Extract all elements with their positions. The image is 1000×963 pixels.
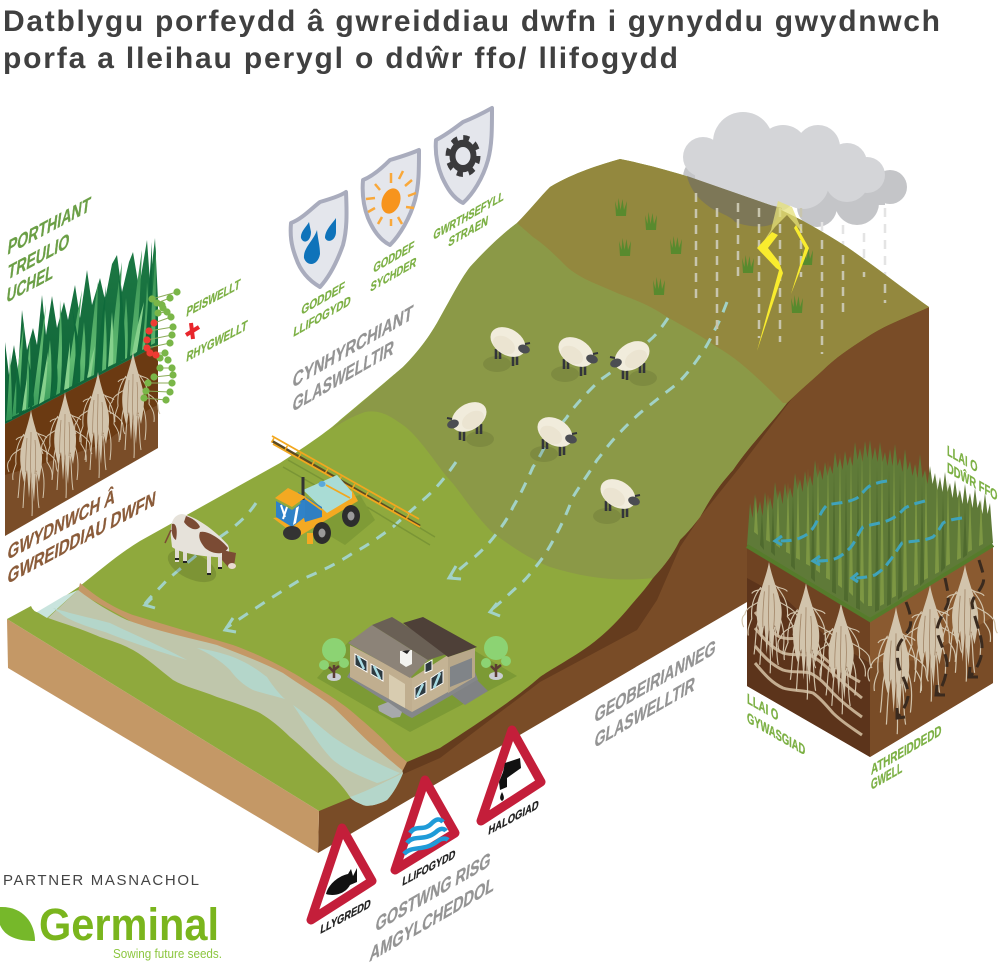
hill side: soil [318, 307, 929, 853]
title [3, 5, 940, 75]
text: better permeability: GWELL [871, 760, 902, 794]
title: Datblygu porfeydd â gwreiddiau dwfn i gynyddu gwydnwch [3, 5, 940, 38]
text: fescue plus ryegrass: RHYGWELLT [186, 316, 249, 365]
text: lower environmental risk: GOSTWNG RISG [374, 848, 492, 937]
warning sign: contamination: HALOGIAD [488, 797, 539, 838]
text: shield captions: LLIFOGYDD [293, 293, 352, 340]
right face [870, 547, 993, 757]
drainage arrows [897, 560, 984, 718]
DNA helix [140, 288, 181, 404]
deep roots [742, 562, 997, 734]
roots [8, 352, 160, 516]
house with trees [317, 617, 517, 732]
text: less compaction: GYWASGIAD [747, 710, 805, 759]
warning sign: flood: LLIFOGYDD [402, 847, 456, 889]
icon: shield flood tolerance [291, 192, 347, 287]
text: grassland geoengineering: GEOBEIRIANNEG [593, 636, 717, 728]
text: commercial partner: PARTNER MASNACHOL [3, 872, 199, 889]
logo: Germinal: Germinal [39, 899, 219, 950]
text: less compaction [747, 691, 805, 759]
text: fescue plus ryegrass [186, 275, 249, 365]
text: high digestibility forage: PORTHIANT [6, 193, 92, 260]
left face [747, 547, 870, 757]
cloud shadow [687, 176, 782, 226]
text: less compaction: LLAI O [747, 691, 778, 725]
icon: storm cloud [683, 112, 907, 238]
cow [163, 514, 236, 589]
zone: upland olive [517, 159, 929, 403]
text: shield captions: GODDEF [373, 238, 415, 276]
title: porfa a lleihau perygl o ddŵr ffo/ llifogydd [3, 42, 678, 75]
soil block [5, 345, 158, 536]
river channels [53, 608, 403, 806]
grass [5, 238, 158, 424]
text: less runoff: LLAI O [947, 443, 977, 476]
text: high digestibility forage: UCHEL [5, 260, 55, 308]
text: resilience with deep roots: GWREIDDIAU DWFN [6, 487, 157, 589]
rain beyond the hill [822, 208, 885, 303]
grass tufts [615, 198, 813, 313]
icon: shield drought tolerance [363, 150, 419, 245]
text: better permeability: ATHREIDDEDD [871, 723, 941, 779]
sprayer tractor [272, 436, 435, 545]
warning sign: pollution: LLYGREDD [320, 896, 371, 937]
flow arrows on the slope [145, 302, 727, 632]
text: fescue plus ryegrass: PEISWELLT [186, 275, 242, 320]
text: grassland production: CYNHYRCHIANT [291, 301, 414, 393]
text: high digestibility forage: TREULIO [6, 229, 71, 285]
warning sign: flood [395, 780, 456, 889]
logo: Germinal: Sowing future seeds. [113, 946, 222, 961]
text: grassland geoengineering: GLASWELLTIR [593, 673, 696, 753]
land surface [7, 159, 929, 811]
text: better permeability [871, 723, 941, 794]
icon: shield stress resistance [436, 108, 492, 203]
text: high digestibility forage [5, 193, 92, 308]
lightning [757, 201, 809, 351]
spray boom [272, 436, 420, 527]
text: shield captions: GODDEF [301, 279, 346, 318]
text: shield captions: SYCHDER [370, 254, 417, 295]
panel: soil block cutaway [742, 440, 997, 757]
text: grassland production: GLASWELLTIR [291, 336, 395, 417]
zone: grassland mid slope [330, 159, 787, 580]
sheep flock [446, 321, 657, 524]
warning sign: pollution [311, 828, 372, 937]
tree right [481, 636, 511, 680]
text: resilience with deep roots: GWYDNWCH Â [6, 484, 117, 565]
land front face: sand [7, 619, 319, 853]
text: shield captions: STRAEN [448, 213, 489, 250]
river [37, 583, 407, 806]
warning sign: contamination [481, 730, 541, 838]
logo: Germinal [0, 899, 222, 961]
panel: high-digestibility grass with deep roots [5, 238, 160, 536]
text: shield captions: GWRTHSEFYLL [433, 188, 505, 243]
grass top [747, 440, 993, 620]
rain [696, 193, 885, 354]
text: shield captions [293, 188, 505, 340]
tree left [319, 638, 349, 681]
text: less runoff [947, 443, 997, 505]
runoff arrows [775, 481, 962, 582]
compression lines [755, 612, 862, 735]
